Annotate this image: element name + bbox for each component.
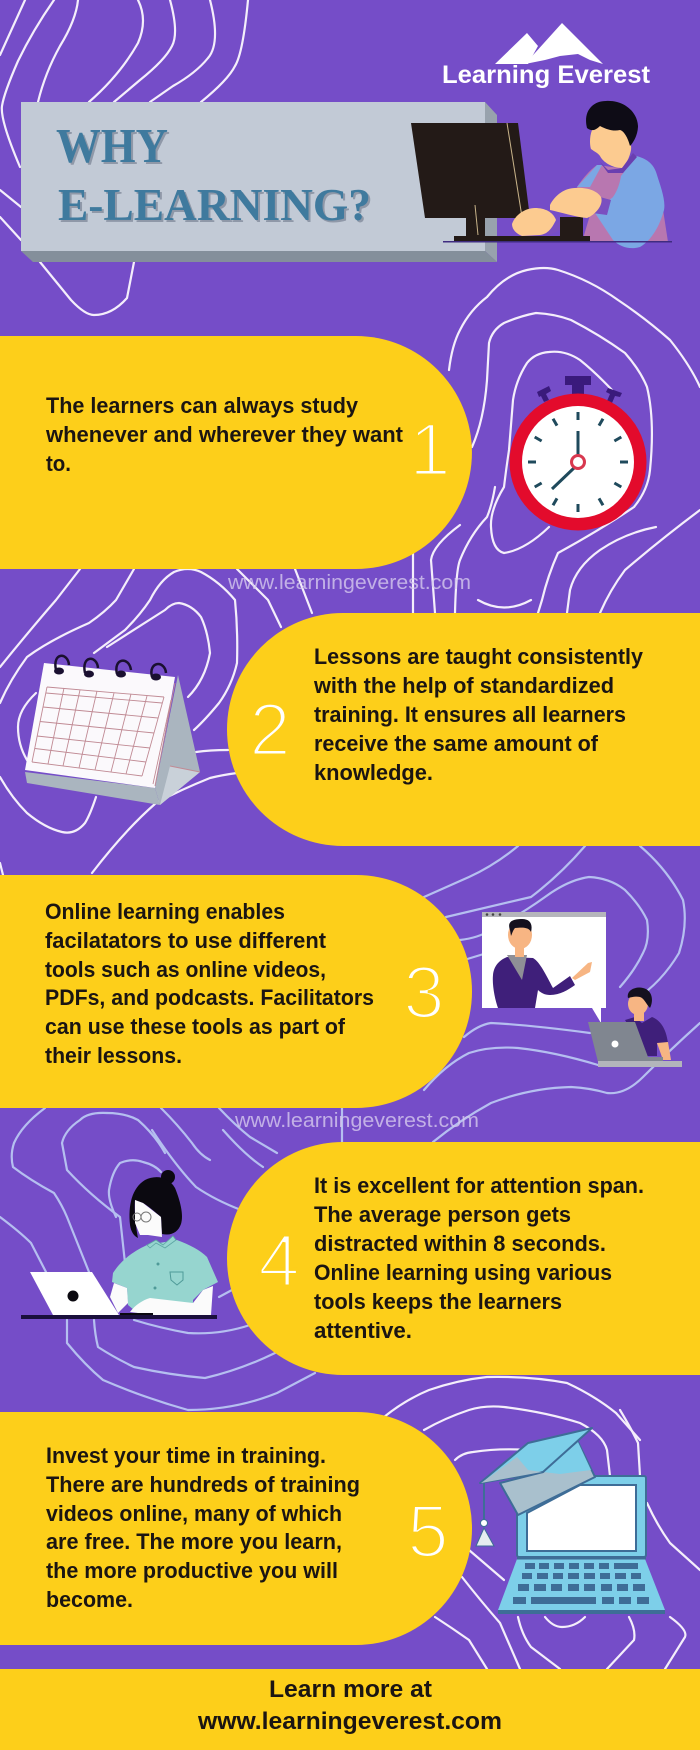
panel: card 2 bbox=[227, 613, 700, 846]
panel: card 5 bbox=[0, 1412, 472, 1645]
text: card 2 body: Lessons are taught consistently bbox=[314, 644, 644, 669]
text: card 3 body: can use these tools as part of bbox=[45, 1014, 346, 1039]
heading: why e-learning: WHY bbox=[56, 118, 168, 173]
number 5: 5 bbox=[407, 1490, 449, 1573]
text: card 3 body: their lessons. bbox=[45, 1043, 182, 1068]
heading: why e-learning bbox=[56, 118, 371, 230]
text: card 5 body: There are hundreds of training bbox=[46, 1472, 360, 1497]
title panel bbox=[21, 102, 497, 262]
text: card 4 body: It is excellent for attention span. bbox=[314, 1173, 644, 1198]
text: card 5 body: become. bbox=[46, 1587, 133, 1612]
text: card 2 body: knowledge. bbox=[314, 760, 433, 785]
footer text: Learn more at bbox=[269, 1676, 432, 1703]
text: card 5 body: videos online, many of which bbox=[46, 1501, 342, 1526]
icon: desk calendar bbox=[25, 656, 200, 805]
heading: why e-learning: E-LEARNING? bbox=[58, 179, 371, 230]
text: card 4 body: tools keeps the learners bbox=[314, 1289, 562, 1314]
text: card 1 body bbox=[45, 393, 404, 476]
text: card 5 body: Invest your time in training. bbox=[46, 1443, 326, 1468]
text: card 4 body: attentive. bbox=[314, 1318, 412, 1343]
watermark 2: www.learningeverest.com bbox=[234, 1110, 479, 1132]
panel: card 1 bbox=[0, 336, 472, 569]
icon: video call teacher and student bbox=[482, 912, 682, 1067]
icon: laptop with graduation cap bbox=[476, 1428, 665, 1614]
text: card 1 body: The learners can always study bbox=[46, 393, 359, 418]
footer banner bbox=[0, 1669, 700, 1750]
text: card 4 body: The average person gets bbox=[314, 1202, 571, 1227]
text: card 3 body: facilatators to use different bbox=[45, 928, 327, 953]
text: card 3 body: Online learning enables bbox=[45, 899, 285, 924]
text: card 2 body: receive the same amount of bbox=[314, 731, 599, 756]
text: card 1 body: to. bbox=[46, 451, 71, 476]
number 2: 2 bbox=[249, 688, 291, 771]
icon: woman at laptop bbox=[21, 1170, 218, 1319]
text: card 1 body: whenever and wherever they want bbox=[45, 422, 404, 447]
text: card 4 body: Online learning using various bbox=[314, 1260, 612, 1285]
text: card 5 body: the more productive you will bbox=[46, 1558, 338, 1583]
number 1: 1 bbox=[409, 408, 451, 491]
logo: Learning Everest bbox=[442, 23, 651, 89]
text: card 4 body bbox=[314, 1173, 644, 1343]
text: card 2 body: with the help of standardized bbox=[313, 673, 614, 698]
footer text bbox=[197, 1676, 502, 1735]
text: card 2 body bbox=[313, 644, 644, 785]
panel: card 4 bbox=[227, 1142, 700, 1375]
logo: Learning Everest: Learning Everest bbox=[442, 61, 651, 89]
watermark 1: www.learningeverest.com bbox=[227, 572, 471, 594]
footer text: www.learningeverest.com bbox=[197, 1708, 502, 1735]
text: card 3 body bbox=[45, 899, 374, 1068]
icon: person at computer bbox=[411, 101, 672, 248]
text: card 3 body: PDFs, and podcasts. Facilitators bbox=[45, 985, 374, 1010]
text: card 5 body: are free. The more you learn, bbox=[46, 1529, 342, 1554]
text: card 4 body: distracted within 8 seconds. bbox=[314, 1231, 606, 1256]
number 4: 4 bbox=[258, 1219, 300, 1302]
icon: stopwatch bbox=[510, 376, 646, 530]
number 3: 3 bbox=[403, 951, 445, 1034]
text: card 3 body: tools such as online videos, bbox=[45, 957, 326, 982]
text: card 5 body bbox=[46, 1443, 360, 1612]
text: card 2 body: training. It ensures all learners bbox=[314, 702, 626, 727]
panel: card 3 bbox=[0, 875, 472, 1108]
